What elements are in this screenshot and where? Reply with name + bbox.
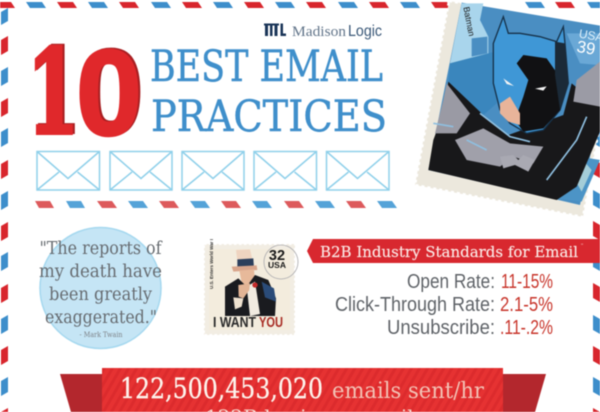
icon: envelope 2 (110, 152, 172, 190)
open rate: 11-15% (501, 271, 553, 293)
Uncle Sam postage stamp (204, 239, 298, 335)
quote text: my death have (39, 262, 162, 282)
bottom ribbon: emails sent per hour: 122,500,453,020 (120, 372, 323, 405)
Uncle Sam postage stamp: U.S. Enters World War I (209, 239, 214, 289)
big red number 10: 1 (29, 24, 81, 160)
bottom ribbon: emails sent per hour (60, 368, 546, 412)
click-through rate: 2.1-5% (500, 294, 553, 316)
ribbon: B2B Industry Standards: B2B Industry Standards for Email (320, 243, 578, 261)
open rate: Open Rate: (407, 271, 495, 293)
Uncle Sam figure (225, 249, 276, 316)
ribbon: B2B Industry Standards (307, 239, 600, 263)
big red number 10: 0 (76, 25, 142, 161)
logo: MadisonLogic (264, 23, 382, 40)
ribbon: B2B Industry Standards: " (581, 244, 583, 250)
row of five envelope icons (37, 152, 389, 190)
logo: MadisonLogic: Logic (348, 23, 382, 40)
quote text: "The reports of (40, 239, 163, 259)
icon: envelope 1 (37, 152, 100, 190)
email benchmark statistics (335, 271, 553, 339)
unsubscribe rate: .11-.2% (500, 317, 553, 339)
icon: envelope 3 (182, 152, 244, 190)
icon: envelope 5 (326, 152, 389, 190)
divider stripes under envelopes (35, 201, 397, 208)
Batman postage stamp (415, 1, 600, 217)
title: Best Email Practices: PRACTICES (151, 92, 387, 142)
bottom ribbon: emails sent per hour: emails sent/hr (332, 379, 484, 404)
quote text: been greatly (49, 285, 152, 305)
Batman postage stamp: Batman (461, 6, 477, 37)
logo: MadisonLogic: Madison (292, 24, 347, 40)
big red number 10: 0 (78, 24, 144, 160)
quote text (39, 239, 163, 339)
open rate (407, 271, 553, 293)
click-through rate: Click-Through Rate: (335, 294, 495, 316)
Batman postage stamp: 39 (575, 37, 597, 59)
quote circle (39, 228, 163, 348)
title: Best Email Practices (150, 42, 387, 142)
Uncle Sam postage stamp: USA (268, 260, 286, 270)
quote text: exaggerated." (45, 308, 157, 328)
big red number 10: 1 (27, 25, 79, 161)
big red number 10 (27, 24, 144, 161)
title: Best Email Practices: BEST EMAIL (150, 42, 383, 92)
Uncle Sam postage stamp: I WANT (213, 315, 256, 331)
quote text: - Mark Twain (80, 330, 123, 339)
Uncle Sam postage stamp: YOU (259, 315, 283, 331)
Uncle Sam postage stamp: 32 (269, 248, 285, 264)
icon: envelope 4 (254, 152, 316, 190)
unsubscribe rate: Unsubscribe: (387, 317, 495, 339)
